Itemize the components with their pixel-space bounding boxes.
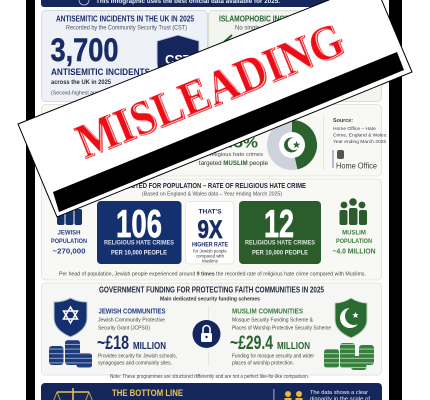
subtitle: CST: Recorded by the Community Security Trust (CST) xyxy=(66,26,187,32)
icon: people gold xyxy=(284,391,302,400)
stat: percent muslim: 45% xyxy=(224,134,258,152)
stat: 3,700: 3,700 xyxy=(50,32,118,68)
stamp text: MISLEADING xyxy=(68,11,352,169)
black stripe xyxy=(53,52,404,212)
top banner: data note xyxy=(41,0,382,7)
icon: scales xyxy=(53,388,93,400)
stat: 18 million xyxy=(97,333,166,354)
callout: 9x higher rate: THAT'S xyxy=(198,208,222,216)
subtitle: no single source: No single national dataset xyxy=(235,26,304,32)
text: muslim scheme: Places of Worship Protective Security Scheme xyxy=(232,326,331,332)
stat: 18 million: MILLION xyxy=(133,340,166,352)
heading: antisemitic incidents: ANTISEMITIC INCIDENTS IN THE UK IN 2025 xyxy=(56,14,194,24)
label: muslim population xyxy=(332,230,376,256)
icon: lock xyxy=(192,320,220,348)
icon: leaf mark xyxy=(224,35,232,42)
label: jewish population: JEWISH xyxy=(57,230,81,236)
text: jewish funding description: Provides security for Jewish schools, xyxy=(98,354,177,360)
text: targeted muslim people: targeted MUSLIM people xyxy=(199,160,269,167)
icon: navy coins xyxy=(49,340,92,368)
text: muslim funding description xyxy=(232,354,314,366)
subtitle: funding schemes: Main dedicated security funding schemes xyxy=(160,296,260,302)
source text: Home Office – Hate xyxy=(333,126,376,132)
stat box: 12 xyxy=(239,201,321,264)
logo: home office xyxy=(332,150,377,170)
panel: government funding xyxy=(42,283,382,375)
panel: islamophobic incidents xyxy=(208,10,382,102)
stat box: 12: 12 xyxy=(264,203,294,246)
text: second-highest note: (Second-highest annual total on record) xyxy=(51,90,142,96)
source text: Year ending March 2025 xyxy=(333,139,386,145)
left black border xyxy=(26,0,35,400)
callout: 9x higher rate: 9X xyxy=(198,216,223,244)
stat box: 106: PER 10,000 PEOPLE xyxy=(111,250,168,256)
heading: islamophobic incidents: ISLAMOPHOBIC INCIDENTS IN THE UK IN 2025 xyxy=(219,14,369,24)
text: muslim funding description: Funding for mosque security and wider xyxy=(232,354,314,360)
heading: adjusted for population: ADJUSTED FOR POPULATION – RATE OF RELIGIOUS HATE CRIME xyxy=(115,181,306,190)
icon: jewish population people xyxy=(56,198,82,225)
logo: home office: Home Office xyxy=(336,160,377,170)
stat box: 12: RELIGIOUS HATE CRIMES xyxy=(245,240,315,246)
text: bottom line summary: The data shows a clear xyxy=(310,390,368,396)
label: muslim population: POPULATION xyxy=(336,239,372,245)
text: muslim funding description: places of worship protection. xyxy=(232,360,294,366)
panel: adjusted for population xyxy=(42,179,382,280)
divider xyxy=(272,389,275,400)
stat box: 106: 106 xyxy=(116,203,162,246)
icon: muslim population people xyxy=(340,198,367,225)
text: jewish scheme xyxy=(98,318,165,332)
text: jewish scheme: Jewish Community Protective xyxy=(98,318,165,324)
icon: CST shield xyxy=(157,35,199,92)
callout: 9x higher rate: Muslims xyxy=(202,258,218,264)
stat box: 106 xyxy=(97,201,182,264)
callout: 9x higher rate: HIGHER RATE xyxy=(192,242,228,248)
text: muslim scheme xyxy=(232,318,331,332)
icon: jewish shield xyxy=(54,298,87,337)
stat box: 106: RELIGIOUS HATE CRIMES xyxy=(104,240,174,246)
label: muslim population: MUSLIM xyxy=(342,230,366,236)
text: jewish scheme: Security Grant (JCPSG) xyxy=(98,326,150,332)
callout: 9x higher rate: for Jewish people xyxy=(193,248,227,254)
heading: the bottom line: THE BOTTOM LINE xyxy=(112,388,183,398)
heading: muslim communities: MUSLIM COMMUNITIES xyxy=(232,306,303,316)
right black border xyxy=(389,0,402,400)
text: religious hate crimes: of religious hate crimes xyxy=(203,152,263,158)
stat box: 12: PER 10,000 PEOPLE xyxy=(252,250,309,256)
callout: 9x higher rate xyxy=(186,202,234,264)
divider xyxy=(322,115,325,170)
text: muslim scheme: Mosque Security Funding Scheme & xyxy=(232,318,314,324)
heading: government funding: GOVERNMENT FUNDING FOR PROTECTING FAITH COMMUNITIES IN 2025 xyxy=(99,286,324,294)
icon: green coins xyxy=(324,343,374,370)
icon: star xyxy=(293,141,300,148)
note: comparison caveat: Note: These programmes are structured differently and are not a perfect like-for-like comparison. xyxy=(110,374,309,380)
source text: Source: xyxy=(333,118,353,124)
note: per head: Per head of population, Jewish people experienced around 9 times the recorded rate of religious hate crime compared with Muslims. xyxy=(59,272,366,278)
source text: Crime, England & Wales: xyxy=(333,132,387,138)
text: jewish funding description: synagogues and community sites. xyxy=(98,360,172,366)
panel: the bottom line xyxy=(41,383,382,400)
callout: 9x higher rate: compared with xyxy=(196,254,225,258)
label: muslim population: ~4.0 MILLION xyxy=(332,248,376,256)
heading: jewish communities: JEWISH COMMUNITIES xyxy=(98,306,166,316)
panel: antisemitic incidents xyxy=(42,10,208,102)
icon: CST shield: CST xyxy=(165,52,191,67)
stat: 18 million: ~£18 xyxy=(97,333,129,354)
text: jewish funding description xyxy=(98,354,177,366)
text: bottom line summary xyxy=(310,390,371,400)
stat: 29.4 million: ~£29.4 xyxy=(230,333,273,354)
text: across the UK: across the UK in 2025 xyxy=(51,79,111,86)
chart: donut xyxy=(267,120,317,170)
divider xyxy=(207,306,210,366)
label: jewish population xyxy=(51,230,87,256)
panel: religious hate crime share xyxy=(42,104,387,176)
stat: 29.4 million: MILLION xyxy=(277,340,310,352)
label: jewish population: ~270,000 xyxy=(52,248,86,256)
label: antisemitic incidents: ANTISEMITIC INCIDENTS xyxy=(51,67,150,78)
icon: green shield xyxy=(335,298,367,338)
subtitle: data basis: (Based on England & Wales data – Year ending March 2025) xyxy=(142,192,282,198)
label: jewish population: POPULATION xyxy=(51,239,87,245)
source text xyxy=(333,118,387,145)
